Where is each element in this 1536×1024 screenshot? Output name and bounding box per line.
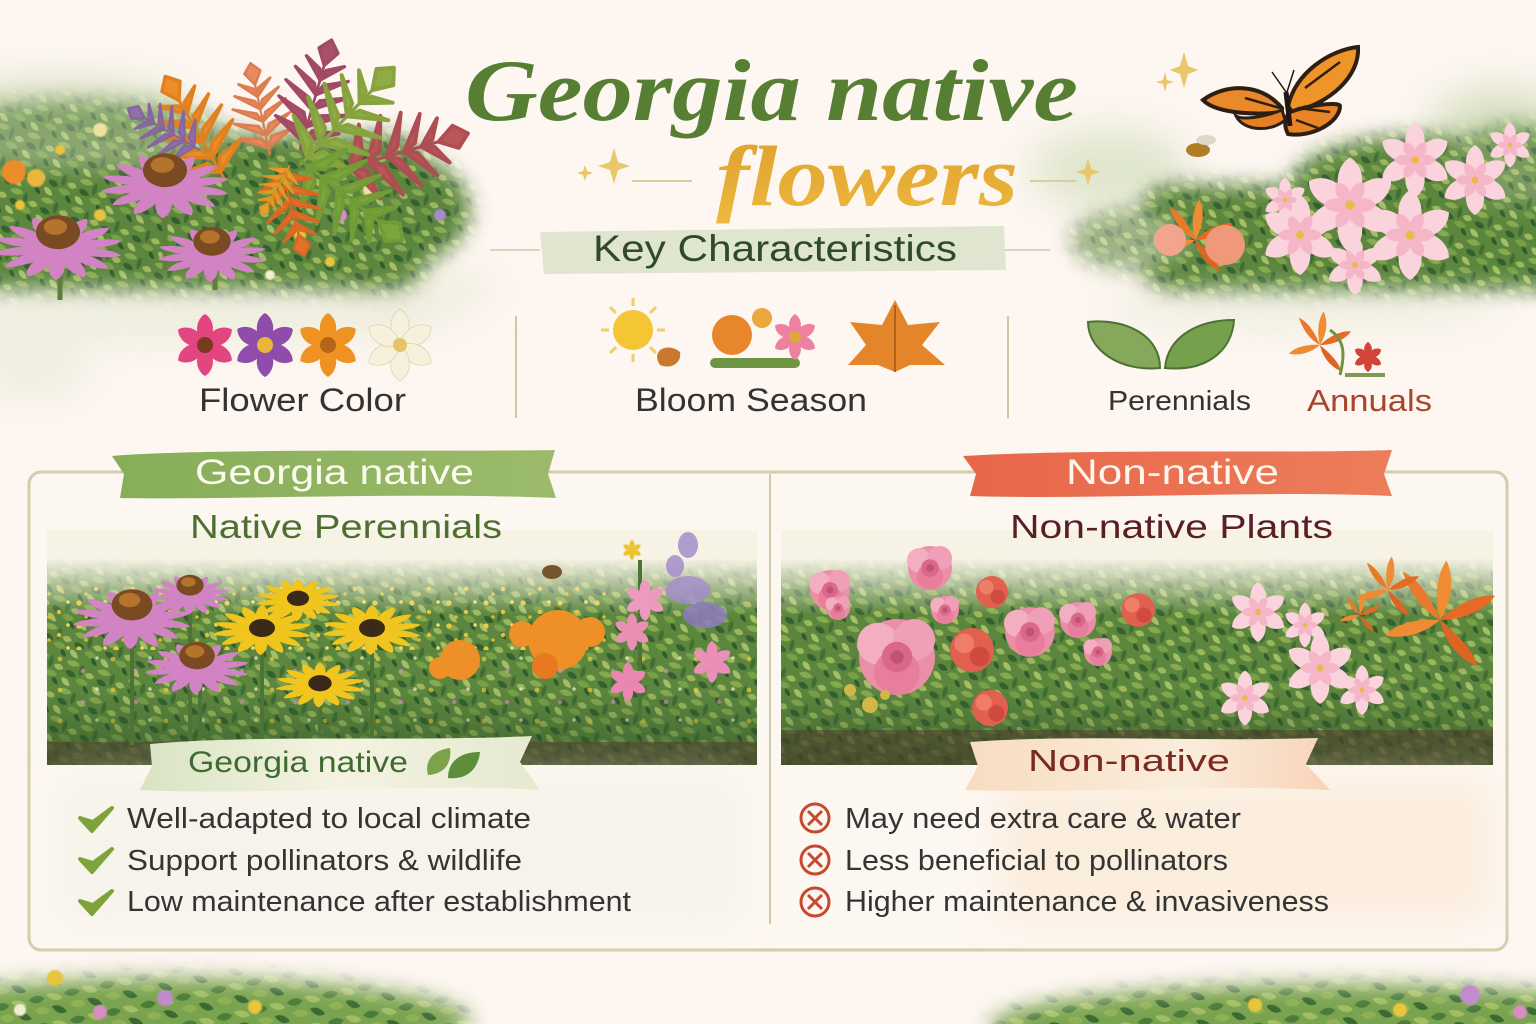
item: Support pollinators & wildlife <box>127 845 522 877</box>
garden illustration: non-native plants <box>781 530 1495 765</box>
item: Less beneficial to pollinators <box>845 845 1228 877</box>
divider <box>1007 316 1009 418</box>
item: May need extra care & water <box>845 803 1241 835</box>
ribbon: Non-native: Non-native <box>1028 743 1230 778</box>
icon: green leaves <box>1088 320 1234 369</box>
panel body wash <box>1000 780 1490 920</box>
label: Bloom Season: Bloom Season <box>635 382 867 418</box>
badge: Georgia native: Georgia native <box>195 453 474 492</box>
ribbon: Non-native <box>965 738 1330 791</box>
label: Flower Color: Flower Color <box>199 382 406 418</box>
illustration: bottom-left garden strip <box>0 962 483 1024</box>
heading banner: Key Characteristics: Key Characteristics <box>593 228 957 269</box>
list: drawbacks <box>801 803 1329 918</box>
icon: monarch butterfly <box>1203 47 1358 135</box>
icon: four flower blossoms <box>174 309 436 381</box>
badge: Georgia native <box>112 450 556 498</box>
badge: Non-native: Non-native <box>1066 453 1279 492</box>
icon: annual flowers <box>1289 312 1385 375</box>
title: flowers <box>716 128 1018 224</box>
title <box>465 43 1078 224</box>
section: flower color <box>174 309 436 418</box>
panel: Georgia native <box>47 450 757 920</box>
comparison frame <box>29 472 1507 950</box>
ribbon: Georgia native with leaf: Georgia native <box>188 746 408 779</box>
illustration: top-right garden with pink lilies <box>1030 89 1536 330</box>
title: Georgia native <box>465 43 1078 140</box>
section: bloom season <box>601 298 945 418</box>
heading banner: Key Characteristics <box>490 226 1050 274</box>
garden illustration: native perennials <box>47 530 757 765</box>
panel: non-native <box>781 450 1495 920</box>
list: benefits <box>80 803 631 918</box>
illustration: bottom-right garden strip <box>978 968 1536 1024</box>
ribbon: Georgia native with leaf <box>140 736 540 792</box>
illustration: top-left garden with coneflowers and ferns <box>0 38 486 398</box>
section: perennials and annuals <box>1088 312 1432 418</box>
panel body wash <box>60 780 740 920</box>
icon: bee <box>1186 135 1216 157</box>
heading: Native Perennials: Native Perennials <box>190 508 502 545</box>
item: Well-adapted to local climate <box>127 803 531 835</box>
heading: Non-native Plants: Non-native Plants <box>1010 508 1333 545</box>
label: Annuals: Annuals <box>1307 383 1432 418</box>
badge: Non-native <box>963 450 1392 497</box>
icon: sparkles <box>577 52 1198 186</box>
item: Higher maintenance & invasiveness <box>845 886 1329 918</box>
icon: coneflowers <box>0 153 267 300</box>
icon: fern fronds <box>115 30 479 272</box>
item: Low maintenance after establishment <box>127 886 631 918</box>
central divider <box>769 474 771 924</box>
label: Perennials: Perennials <box>1108 385 1251 416</box>
divider <box>515 316 517 418</box>
icon: sun, flowers and autumn leaf <box>601 298 945 372</box>
